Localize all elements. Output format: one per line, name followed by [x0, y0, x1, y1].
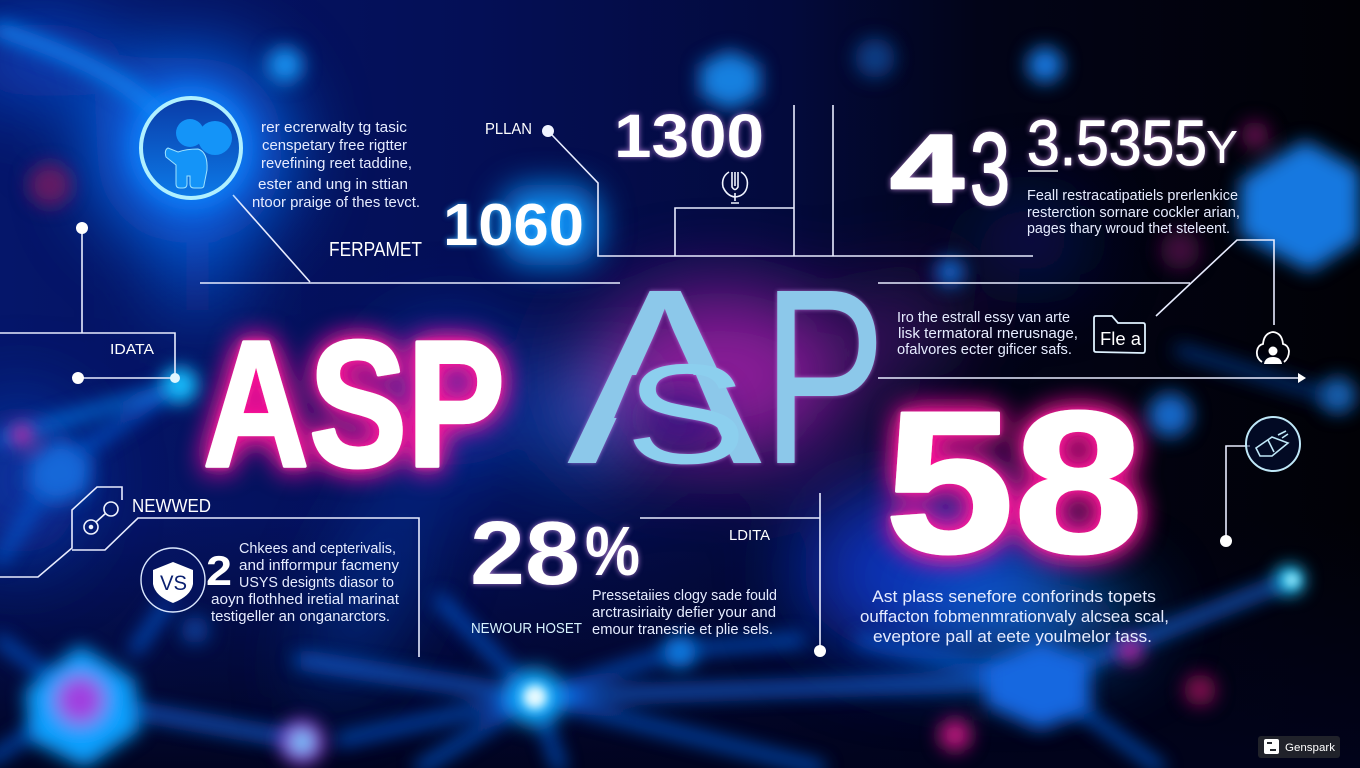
- icon: cloud user: [1257, 332, 1289, 364]
- text block: middle right: ofalvores ecter gificer safs.: [897, 341, 1072, 358]
- icon: shield VS: [141, 548, 205, 612]
- label: PLLAN: PLLAN: [485, 121, 532, 138]
- text block: bottom left: and infformpur facmeny: [239, 557, 399, 574]
- text block: top left: [252, 119, 420, 211]
- label: FERPAMET: FERPAMET: [329, 239, 422, 261]
- text block: top right: resterction sornare cockler arian,: [1027, 204, 1240, 221]
- text block: bottom left: USYS designts diasor to: [239, 574, 394, 591]
- centre logotype: A S P: [566, 288, 879, 468]
- icon: circled tool: [1246, 417, 1300, 471]
- number: 28%: [470, 504, 640, 604]
- text block: top right: Feall restracatipatiels prerlenkice: [1027, 187, 1238, 204]
- number: 3.5355Y: Y: [1206, 121, 1238, 173]
- number: 28%: %: [585, 512, 640, 590]
- text block: middle right: lisk termatoral rnerusnage,: [898, 325, 1078, 342]
- text block: top left: ester and ung in sttian: [258, 176, 408, 193]
- icon: link: [84, 502, 118, 534]
- connector lines: [0, 105, 1306, 657]
- label: NEWOUR HOSET: NEWOUR HOSET: [471, 620, 582, 637]
- centre logotype: A S P: A: [567, 237, 762, 516]
- text block: bottom centre: [592, 587, 777, 638]
- badge: Genspark: [1258, 736, 1340, 758]
- text block: bottom right: Ast plass senefore conforinds topets: [872, 587, 1156, 606]
- label: IDATA: IDATA: [110, 341, 154, 358]
- text block: bottom centre: emour tranesrie et plie sels.: [592, 621, 773, 638]
- big number: ASP: ASP: [203, 304, 505, 505]
- text block: bottom centre: arctrasiriaity defier your and: [592, 604, 776, 621]
- icon: file folder: Fle a: [1100, 329, 1142, 349]
- number: 1060: 1060: [443, 192, 584, 258]
- text block: bottom left: testigeller an onganarctors.: [211, 608, 390, 625]
- text block: bottom right: eveptore pall at eete youlmelor tass.: [873, 627, 1152, 646]
- badge: Genspark: Genspark: [1285, 742, 1336, 754]
- icon: file folder: [1094, 316, 1145, 353]
- text block: bottom left: [211, 540, 400, 625]
- text block: top left: ntoor praige of thes tevct.: [252, 194, 420, 211]
- label: NEWWED: NEWWED: [132, 496, 211, 516]
- number: 28%: 28: [470, 504, 580, 604]
- icon: shield VS: VS: [160, 572, 187, 595]
- text block: top left: revefining reet taddine,: [261, 155, 412, 172]
- icon: microphone: [723, 172, 747, 203]
- text block: top left: censpetary free rigtter: [262, 137, 407, 154]
- number: 43: 3: [970, 112, 1010, 226]
- text block: top left: rer ecrerwalty tg tasic: [261, 119, 408, 136]
- number: 3.5355Y: 3.5355: [1027, 107, 1207, 179]
- number: 43: 4: [890, 114, 964, 223]
- number: 2: 2: [206, 547, 232, 594]
- text block: middle right: [897, 309, 1078, 358]
- text block: bottom left: aoyn flothhed iretial marinat: [211, 591, 400, 608]
- label: LDITA: LDITA: [729, 527, 770, 544]
- text block: bottom right: ouffacton fobmenmrationvaly alcsea scal,: [860, 607, 1169, 626]
- number: 1300: 1300: [614, 102, 764, 170]
- centre logotype: A S P: P: [762, 237, 886, 516]
- text block: top right: [1027, 187, 1240, 237]
- number: 43: [890, 112, 1010, 226]
- text block: bottom centre: Pressetaiies clogy sade fould: [592, 587, 777, 604]
- icon: person with speech bubble: [129, 86, 253, 210]
- big number: 58: 58: [885, 369, 1143, 595]
- text block: bottom right: [860, 587, 1169, 646]
- text block: middle right: Iro the estrall essy van arte: [897, 309, 1070, 326]
- centre logotype: A S P: S: [625, 335, 747, 494]
- text block: top right: pages thary wroud thet steleent.: [1027, 220, 1230, 237]
- text block: bottom left: Chkees and cepterivalis,: [239, 540, 396, 557]
